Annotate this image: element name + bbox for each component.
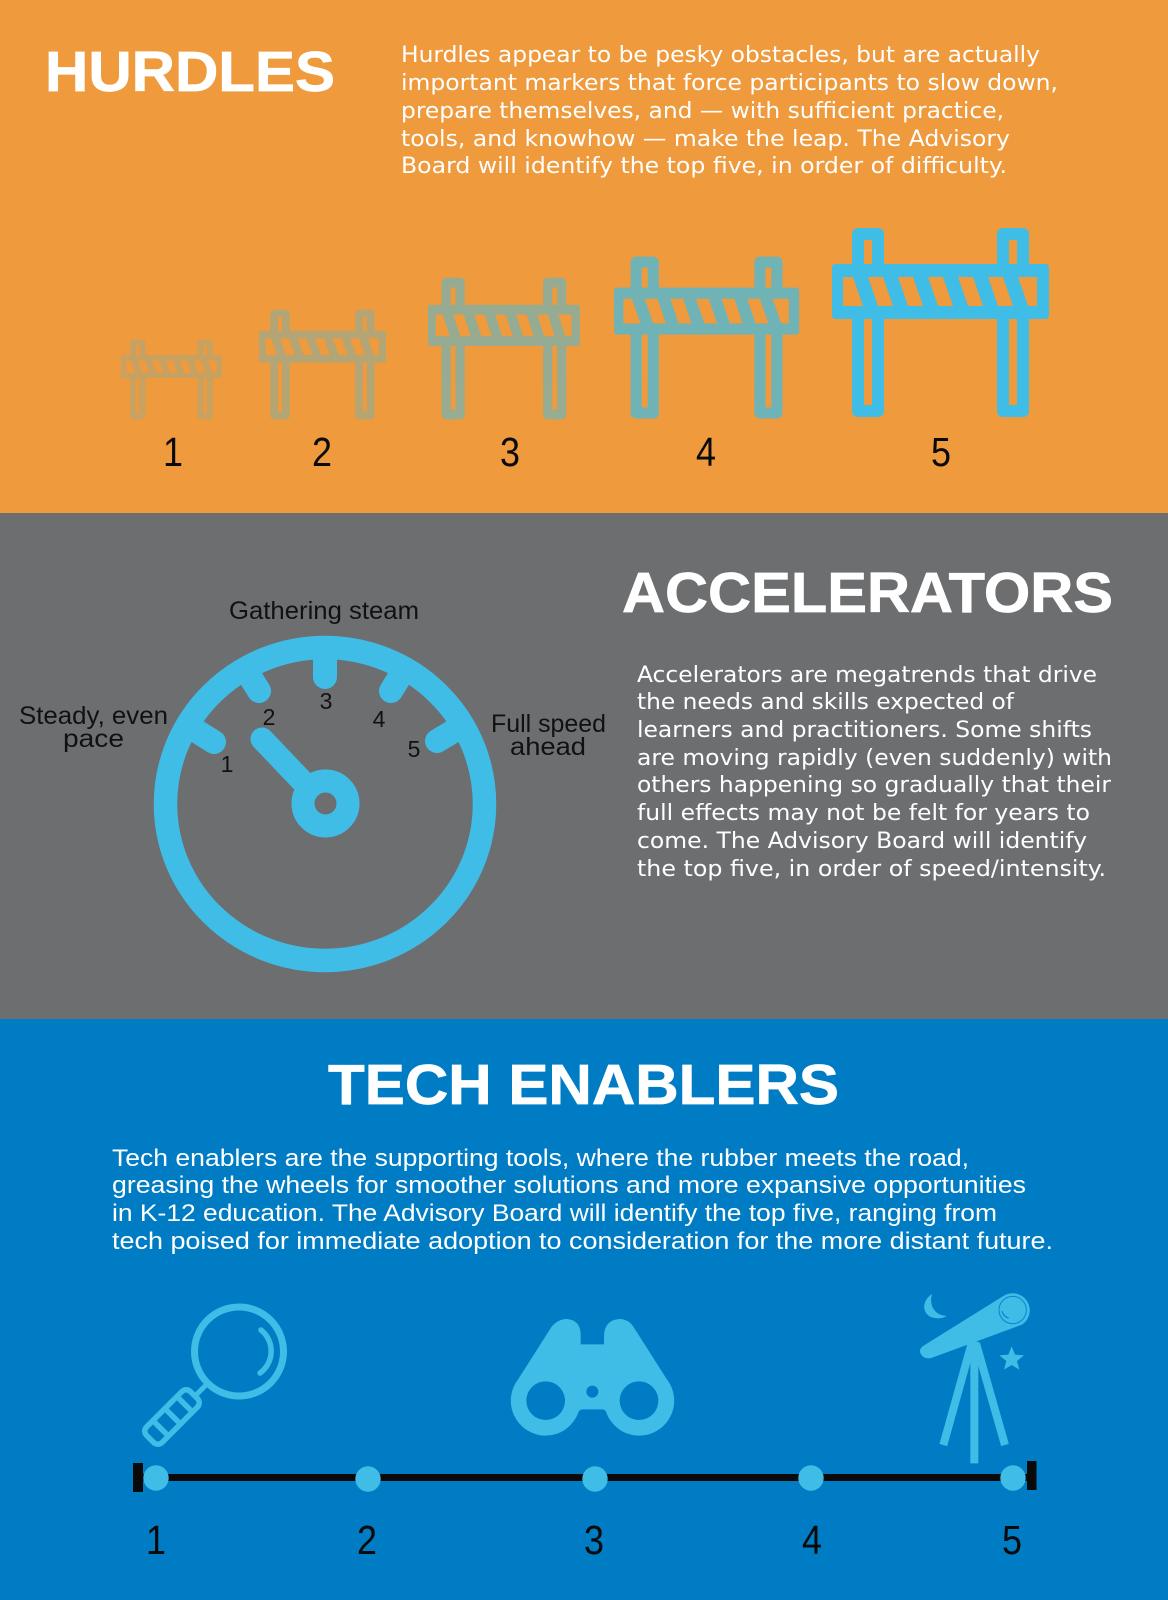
- timeline numbers: 5: [1002, 1517, 1022, 1563]
- gauge numbers: 2: [263, 704, 275, 730]
- timeline numbers: 3: [584, 1517, 604, 1563]
- text block: accelerators description: others happening so gradually that their: [637, 772, 1112, 798]
- hurdles background: [0, 0, 1168, 513]
- panel: hurdles: [0, 0, 1168, 513]
- heading: accelerators: ACCELERATORS: [622, 561, 1113, 625]
- hurdle numbers: [163, 429, 951, 475]
- hurdle numbers: 3: [500, 429, 520, 475]
- icon: hurdle 4: [614, 262, 799, 413]
- text block: tech enablers description: greasing the wheels for smoother solutions and more expansive opportunities: [112, 1172, 1026, 1199]
- text block: hurdles description: tools, and knowhow — make the leap. The Advisory: [401, 126, 1010, 152]
- label: steady, even pace: Steady, even: [19, 702, 168, 730]
- icon: hurdle 5: [832, 234, 1049, 411]
- gauge numbers: 1: [221, 751, 233, 777]
- text block: accelerators description: come. The Advisory Board will identify: [637, 828, 1087, 854]
- label: full speed ahead: ahead: [510, 733, 586, 761]
- gauge ticks: [198, 655, 452, 742]
- text block: hurdles description: important markers that force participants to slow down,: [401, 70, 1058, 96]
- panel: accelerators: [0, 513, 1168, 1019]
- icon: magnifying glass: [142, 1307, 284, 1447]
- timeline numbers: [146, 1517, 1022, 1563]
- icon: hurdle 3: [428, 282, 580, 415]
- timeline numbers: 2: [357, 1517, 377, 1563]
- gauge numbers: 3: [320, 688, 332, 714]
- hurdle numbers: 4: [696, 429, 716, 475]
- text block: accelerators description: learners and practitioners. Some shifts: [637, 717, 1092, 743]
- heading: tech enablers: TECH ENABLERS: [328, 1053, 839, 1117]
- heading: hurdles: HURDLES: [45, 40, 335, 104]
- label: steady, even pace: pace: [63, 725, 124, 753]
- text block: hurdles description: Board will identify the top five, in order of difficulty.: [401, 153, 1007, 179]
- panel: tech enablers: [0, 1019, 1168, 1600]
- text block: accelerators description: [637, 662, 1112, 882]
- timeline numbers: 4: [802, 1517, 822, 1563]
- gauge numbers: 4: [373, 706, 386, 732]
- hurdle numbers: 2: [312, 429, 332, 475]
- icon: telescope: [920, 1293, 1030, 1463]
- tech enablers background: [0, 1019, 1168, 1600]
- gauge needle: [262, 739, 304, 783]
- text block: tech enablers description: Tech enablers are the supporting tools, where the rubber meets the road,: [112, 1145, 969, 1172]
- hurdle numbers: 1: [163, 429, 183, 475]
- gauge numbers: [221, 688, 420, 777]
- text block: accelerators description: the top five, in order of speed/intensity.: [637, 856, 1106, 882]
- accelerators background: [0, 513, 1168, 1019]
- text block: accelerators description: the needs and skills expected of: [637, 689, 1015, 715]
- chart: speedometer gauge: [166, 648, 484, 960]
- hurdle numbers: 5: [931, 429, 951, 475]
- gauge hub: [303, 781, 348, 826]
- text block: hurdles description: prepare themselves, and — with sufficient practice,: [401, 98, 1004, 124]
- timeline: [133, 1461, 1036, 1492]
- gauge numbers: 5: [408, 736, 420, 762]
- text block: tech enablers description: in K-12 education. The Advisory Board will identify the top five, ranging from: [112, 1200, 997, 1227]
- icon: hurdle 1: [121, 343, 222, 416]
- text block: accelerators description: are moving rapidly (even suddenly) with: [637, 745, 1112, 771]
- text block: accelerators description: full effects may not be felt for years to: [637, 800, 1090, 826]
- text block: tech enablers description: [112, 1145, 1053, 1255]
- gauge ring: [166, 648, 484, 960]
- label: steady, even pace: [19, 702, 168, 753]
- text block: accelerators description: Accelerators are megatrends that drive: [637, 662, 1097, 688]
- label: full speed ahead: Full speed: [491, 710, 606, 738]
- timeline numbers: 1: [146, 1517, 166, 1563]
- label: full speed ahead: [491, 710, 606, 761]
- label: gathering steam: Gathering steam: [229, 597, 419, 625]
- text block: tech enablers description: tech poised for immediate adoption to consideration for the more distant future.: [112, 1228, 1053, 1255]
- text block: hurdles description: Hurdles appear to be pesky obstacles, but are actually: [401, 42, 1040, 68]
- icon: binoculars: [511, 1319, 674, 1436]
- icon: hurdle 2: [259, 313, 386, 416]
- text block: hurdles description: [401, 42, 1058, 179]
